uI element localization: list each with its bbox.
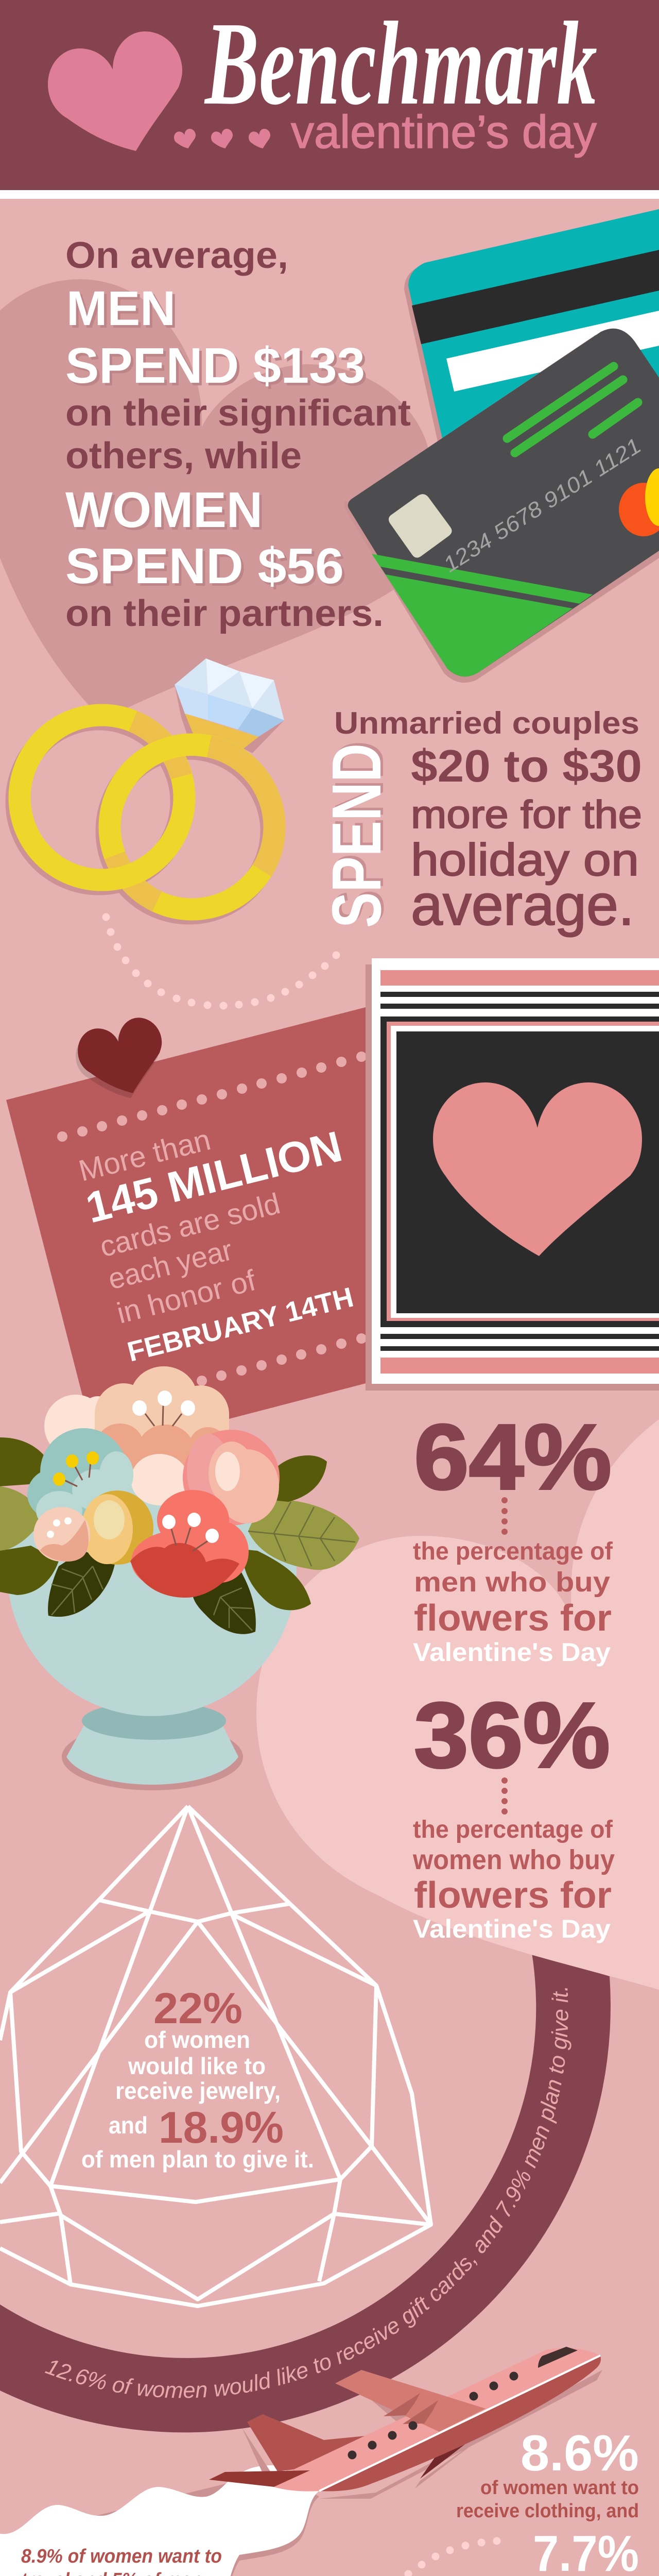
stat: 36 percent of women buy flowers [412, 1684, 615, 1943]
tailplane [209, 2470, 310, 2487]
text: jewelry statistic: of women [144, 2026, 250, 2053]
icon: three small hearts [174, 129, 270, 148]
panel: striped picture frame with heart [366, 958, 659, 1391]
icon: interlocked rings with diamond [16, 658, 284, 913]
stat: 64 percent of men buy flowers: the percentage of [413, 1538, 613, 1565]
card statistic text [75, 1122, 357, 1368]
engines [384, 2393, 420, 2416]
decorative dotted path to shopping bags [372, 2537, 500, 2576]
upper wing [335, 2370, 485, 2432]
text: jewelry statistic: receive jewelry, [115, 2077, 281, 2104]
stat: 64 percent of men buy flowers: 64% [414, 1405, 612, 1509]
leaves [0, 1437, 359, 1634]
text: unmarried couples spend more: holiday on [411, 834, 639, 885]
text: average spend by men and women: others, while [65, 435, 302, 477]
text: average spend by men and women: MEN [66, 281, 176, 336]
stat: 36 percent of women buy flowers: the percentage of [413, 1816, 613, 1843]
stat: 36 percent of women buy flowers: Valentine's Day [413, 1914, 611, 1943]
text: travel statistic [21, 2546, 222, 2576]
text: average spend by men and women: SPEND $133 [65, 337, 365, 394]
card statistic text: each year [105, 1233, 236, 1296]
fuselage [273, 2348, 600, 2492]
stat: 64 percent of men buy flowers: men who buy [414, 1567, 610, 1598]
decorative darker heart behind spending text [0, 279, 429, 721]
icon: large header heart [48, 31, 182, 151]
tail fin [247, 2414, 366, 2471]
panel: greeting card statistic [6, 1006, 372, 1419]
text: average spend by men and women: On average, [65, 235, 288, 276]
card logo circles [619, 468, 659, 536]
decorative dotted path from rings [102, 913, 340, 1010]
card magnetic lines [507, 366, 638, 453]
text: average spend by men and women: WOMEN [65, 482, 263, 538]
plane shadow [242, 2370, 602, 2499]
dotted connector [501, 1777, 508, 1815]
text: unmarried couples spend more [318, 706, 642, 937]
text: jewelry statistic: 18.9% [159, 2103, 284, 2153]
text: clothing statistic: 8.6% [521, 2425, 639, 2481]
text: jewelry statistic: 22% [153, 1984, 242, 2032]
stat: 36 percent of women buy flowers: women who buy [412, 1844, 615, 1875]
pink rose [183, 1430, 280, 1526]
card number: 1234 5678 9101 1121 [439, 433, 645, 577]
decorative large pale heart behind flower stats [256, 1419, 659, 1990]
card statistic text: More than [75, 1123, 214, 1188]
stat: 36 percent of women buy flowers: 36% [414, 1684, 610, 1787]
text: average spend by men and women: on their partners. [65, 593, 384, 634]
red flower [130, 1490, 249, 1598]
text: unmarried couples spend more: more for the [411, 793, 642, 837]
text: clothing statistic: of women want to [480, 2477, 639, 2499]
card statistic text: 145 MILLION [81, 1122, 346, 1232]
text: unmarried couples spend more: Unmarried couples [334, 706, 639, 740]
windows [348, 2372, 518, 2460]
text: gift card statistic on arc: 12.6% of women would like to receive gift cards, and 7.9% men plan to give it. [45, 1988, 571, 2398]
text: jewelry statistic: would like to [128, 2053, 266, 2079]
icon: dark credit card front [344, 329, 659, 683]
card statistic text: FEBRUARY 14TH [124, 1282, 357, 1368]
icon: airplane [209, 2347, 602, 2499]
stat: 36 percent of women buy flowers: flowers for [414, 1875, 612, 1916]
card statistic text: in honor of [114, 1264, 259, 1330]
icon: frame heart [433, 1082, 642, 1256]
text: average spend by men and women: SPEND $56 [65, 538, 344, 594]
cream flower [44, 1395, 116, 1458]
text: average spend by men and women: on their significant [65, 393, 411, 434]
text: travel statistic: 8.9% of women want to [21, 2546, 222, 2567]
card chip [389, 494, 452, 558]
arc band with gift card stat [0, 1953, 611, 2432]
fuselage belly [319, 2355, 601, 2491]
text: unmarried couples spend more: $20 to $30 [411, 740, 642, 791]
text: average spend by men and women [65, 235, 411, 634]
icon: dark red heart on card [76, 1018, 162, 1098]
stat: 64 percent of men buy flowers: Valentine's Day [413, 1638, 611, 1667]
text: jewelry statistic: of men plan to give it. [81, 2146, 314, 2173]
lower wing [420, 2424, 492, 2479]
icon: gem outline [0, 1806, 431, 2306]
dotted rows on card [57, 1052, 367, 1386]
icon: flower vase [7, 1427, 297, 1790]
icon: teal credit card back [404, 209, 659, 464]
rotated word SPEND: SPEND [318, 743, 395, 928]
cream centre petals [131, 1454, 188, 1505]
header band [0, 0, 659, 199]
diamond facets [175, 658, 284, 737]
subtitle: valentine's day: valentine’s day [291, 107, 597, 158]
fuselage stripe [319, 2355, 600, 2491]
text: clothing statistic: receive clothing, and [456, 2500, 639, 2522]
text: clothing statistic [456, 2425, 639, 2576]
teal flower [27, 1428, 133, 1530]
stat: 64 percent of men buy flowers: flowers for [414, 1598, 612, 1639]
card statistic text: cards are sold [97, 1187, 284, 1264]
peach flower [95, 1366, 229, 1476]
icon: flower bouquet [0, 1366, 359, 1634]
text: jewelry statistic [81, 1984, 314, 2173]
stat: 64 percent of men buy flowers [413, 1405, 613, 1667]
cockpit [538, 2347, 578, 2368]
dotted connector [501, 1497, 508, 1535]
yellow rose [81, 1490, 153, 1565]
text: unmarried couples spend more: average. [411, 873, 634, 937]
small peach flower [33, 1507, 90, 1562]
text: jewelry statistic: and [109, 2112, 148, 2139]
icon: contrail cloud [0, 2465, 319, 2576]
